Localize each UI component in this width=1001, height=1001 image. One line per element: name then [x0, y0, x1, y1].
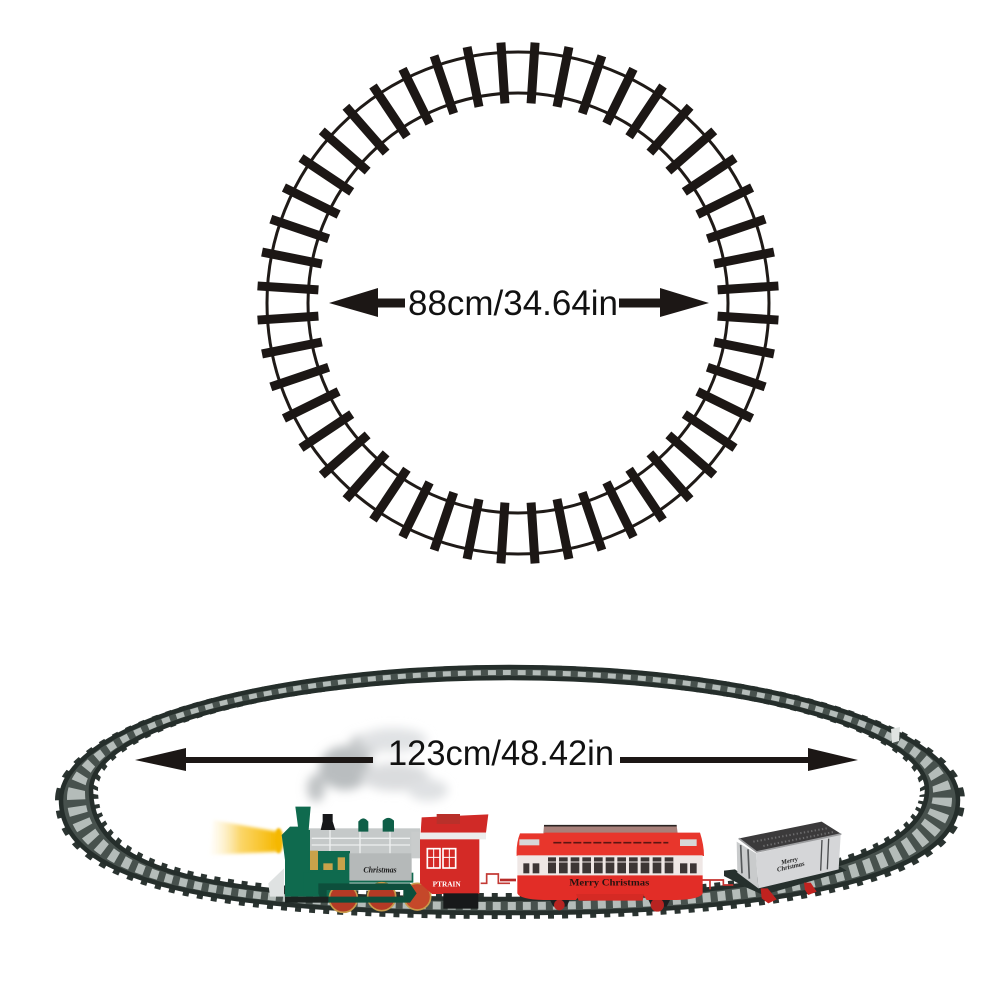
rails [267, 52, 769, 554]
body skirt [576, 894, 644, 901]
script label: Christmas [363, 866, 397, 875]
car label: Merry Christmas [569, 877, 650, 887]
headlight beam [210, 820, 277, 855]
cab roof [421, 814, 488, 833]
arrow: oval width left [135, 748, 373, 771]
label: circle diameter: 88cm/34.64in [408, 284, 618, 323]
arrow: circle diameter right [619, 288, 709, 317]
light track joint [891, 727, 900, 743]
wheels [329, 883, 431, 912]
right coupler [702, 880, 733, 889]
front body [756, 835, 841, 888]
arrow: circle diameter left [329, 288, 405, 317]
sleepers [258, 43, 778, 563]
under track frame [285, 897, 328, 903]
light sleeper highlights [76, 674, 944, 906]
lower body [517, 875, 703, 900]
green domes [358, 818, 394, 832]
left coupler [500, 876, 516, 884]
roof dashes [553, 840, 668, 845]
window mullions [548, 860, 673, 863]
red trucks [761, 883, 817, 903]
locomotive [210, 807, 510, 912]
cab windows [427, 849, 456, 868]
passenger car [500, 825, 733, 912]
coal tender [724, 822, 847, 903]
chassis [724, 867, 847, 895]
cab cut side [411, 832, 420, 858]
smoke [307, 728, 448, 802]
clerestory [543, 825, 678, 833]
ladder [821, 839, 829, 871]
sleeper ends [76, 674, 944, 906]
roof stripe [420, 833, 486, 839]
cab wall between boiler and wheels [303, 873, 413, 883]
window band [517, 855, 703, 875]
side rod [318, 883, 417, 903]
circular track diagram [258, 43, 778, 563]
arrow: oval width right [620, 748, 858, 771]
roof vents [519, 839, 697, 846]
coupler [481, 874, 510, 883]
coal texture [753, 828, 833, 846]
cab base [443, 893, 478, 909]
lower silver panel [349, 853, 412, 881]
infographic canvas [55, 42, 965, 919]
windows [523, 857, 697, 873]
gold trim [310, 851, 345, 870]
black dome [321, 814, 335, 830]
side ribs [741, 845, 749, 879]
track bed [61, 667, 958, 913]
roof [517, 833, 704, 856]
green lower body [303, 851, 350, 897]
roof hatch [437, 814, 460, 824]
wheel trucks [547, 893, 673, 912]
cab [420, 838, 479, 894]
tender label: Merry [780, 856, 799, 867]
front white skirt [268, 868, 284, 897]
smoke stack and front [282, 807, 311, 897]
inner rail [91, 678, 927, 899]
boiler highlights [312, 830, 410, 853]
boiler [307, 828, 420, 854]
coal load [739, 822, 841, 852]
headlight [274, 828, 283, 853]
side body [737, 842, 758, 888]
oval track [61, 667, 958, 913]
clerestory top edge [544, 823, 677, 828]
outer rail [61, 667, 958, 913]
cab label: PTRAIN [433, 879, 461, 888]
coal rim [739, 834, 841, 852]
tender label: Christmas [776, 860, 806, 874]
label: oval width: 123cm/48.42in [388, 734, 614, 773]
